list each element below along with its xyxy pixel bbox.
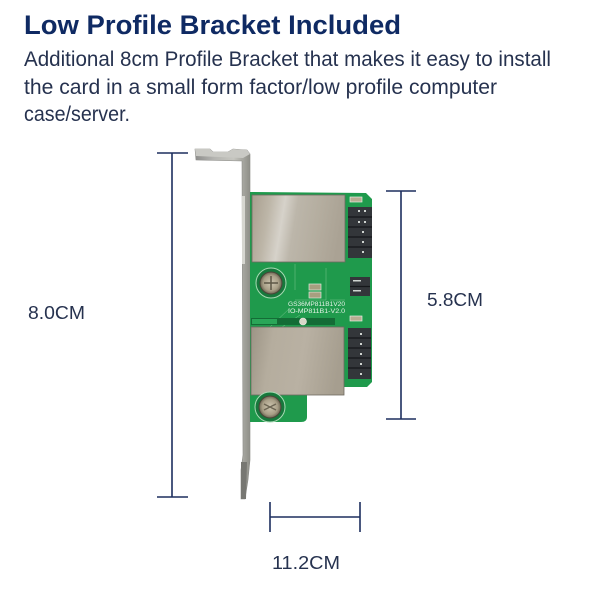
metal low profile bracket <box>195 149 250 499</box>
upper pin header <box>348 207 372 258</box>
green circuit board <box>250 192 372 422</box>
description text: the card in a small form factor/low profile computer <box>24 76 497 99</box>
dimension: height 5.8CM <box>386 191 416 419</box>
icon: lower screw <box>255 392 285 422</box>
icon: upper screw <box>256 268 286 298</box>
board silkscreen text: GS36MP811B1V20 <box>288 301 345 308</box>
capacitor pads <box>309 284 321 298</box>
lower ethernet port <box>251 327 344 395</box>
board silkscreen text: IO-MP811B1-V2.0 <box>288 308 345 315</box>
label: 11.2CM: 11.2CM <box>272 553 340 573</box>
dimension: height 8.0CM <box>157 153 188 497</box>
middle pin header <box>350 277 370 296</box>
description text: case/server. <box>24 103 130 126</box>
description text <box>24 48 551 126</box>
description text: Additional 8cm Profile Bracket that makes it easy to install <box>24 48 551 71</box>
board traces <box>270 264 345 327</box>
dimension: width 11.2CM <box>270 502 360 532</box>
board silkscreen text <box>288 301 345 315</box>
label: 5.8CM: 5.8CM <box>427 290 483 310</box>
small components <box>350 197 362 321</box>
title: Low Profile Bracket Included <box>24 10 401 40</box>
label: 8.0CM: 8.0CM <box>28 303 85 323</box>
upper ethernet port <box>252 195 345 262</box>
lower pin header <box>348 328 371 379</box>
